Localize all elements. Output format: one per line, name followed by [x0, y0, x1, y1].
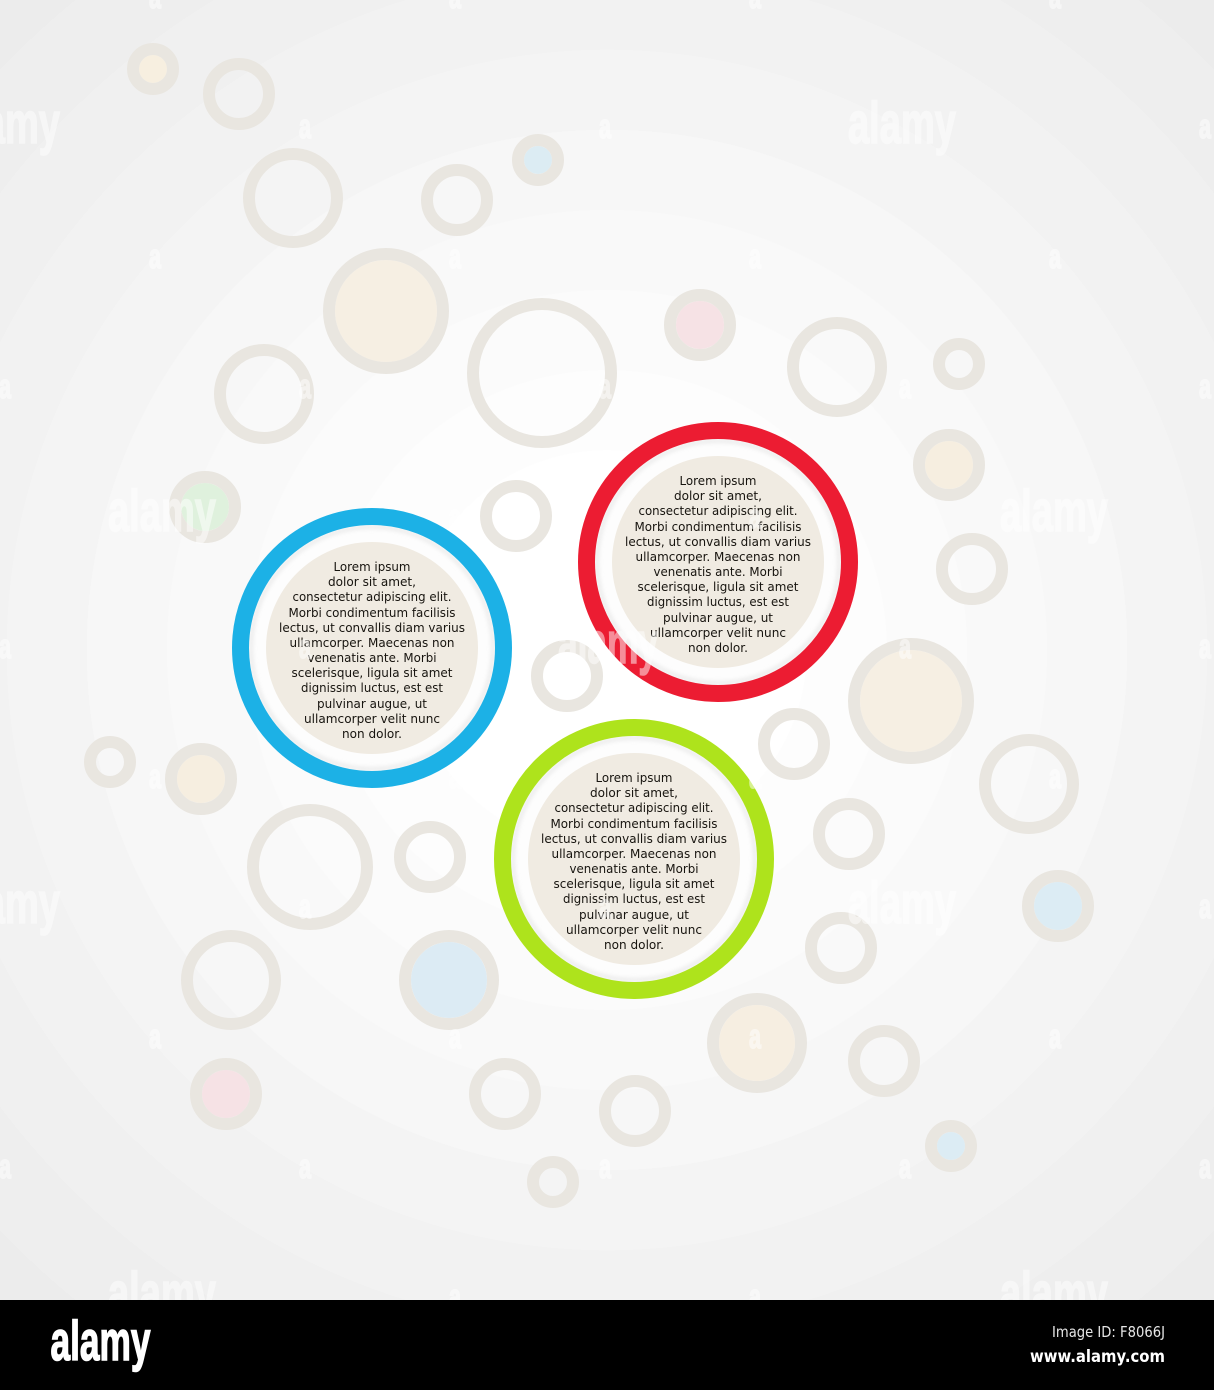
text block: blue circle copy: venenatis ante. Morbi: [308, 650, 436, 665]
watermark overlay: a: [449, 498, 462, 536]
watermark overlay: a: [599, 108, 612, 146]
bubble: large cream bottom: [713, 999, 801, 1087]
text block: green circle copy: ullamcorper. Maecenas non: [552, 846, 716, 861]
text block: red circle copy: Lorem ipsum: [680, 473, 756, 488]
text block: green circle copy: consectetur adipiscing elit.: [554, 800, 714, 815]
text block: red circle copy: non dolor.: [688, 640, 748, 655]
watermark overlay: alamy: [848, 91, 956, 156]
watermark overlay: a: [749, 498, 762, 536]
watermark overlay: a: [449, 1018, 462, 1056]
watermark overlay: a: [299, 888, 312, 926]
watermark overlay: a: [749, 1018, 762, 1056]
panel: green circle: [502, 728, 766, 990]
text block: red circle copy: scelerisque, ligula sit amet: [638, 579, 799, 594]
watermark overlay: a: [749, 238, 762, 276]
text block: blue circle copy: pulvinar augue, ut: [317, 696, 427, 711]
bubble: large cream top: [329, 254, 443, 368]
text block: blue circle copy: dolor sit amet,: [328, 574, 416, 589]
text block: red circle copy: ullamcorper. Maecenas non: [636, 549, 800, 564]
watermark overlay: a: [449, 238, 462, 276]
text block: green circle copy: lectus, ut convallis diam varius: [541, 831, 727, 846]
footer bar: [0, 1300, 1214, 1390]
text block: green circle copy: dignissim luctus, est est: [563, 891, 705, 906]
text block: green circle copy: Lorem ipsum: [596, 770, 672, 785]
watermark overlay: a: [299, 368, 312, 406]
watermark overlay: a: [149, 238, 162, 276]
bubble: pink top: [670, 295, 730, 355]
text block: green circle copy: non dolor.: [604, 937, 664, 952]
footer logo: alamy: [50, 1309, 150, 1372]
text block: blue circle copy: ullamcorper velit nunc: [304, 711, 440, 726]
text block: red circle copy: Morbi condimentum facilisis: [634, 519, 802, 534]
text block: blue circle copy: Morbi condimentum facilisis: [288, 605, 456, 620]
text block: blue circle copy: Lorem ipsum: [334, 559, 410, 574]
text block: green circle copy: venenatis ante. Morbi: [570, 861, 698, 876]
text block: blue circle copy: ullamcorper. Maecenas non: [290, 635, 454, 650]
text block: blue circle copy: [279, 559, 465, 741]
watermark overlay: alamy: [108, 479, 216, 544]
bubble: cream right: [919, 435, 979, 495]
text block: blue circle copy: dignissim luctus, est est: [301, 680, 443, 695]
text block: green circle copy: [541, 770, 727, 952]
watermark overlay: a: [149, 758, 162, 796]
bubble: small blue: [518, 140, 558, 180]
watermark overlay: a: [899, 628, 912, 666]
watermark overlay: alamy: [1000, 1261, 1108, 1326]
bubble: large blue bottom: [405, 936, 493, 1024]
bubble: small cream: [133, 49, 173, 89]
watermark overlay: a: [149, 1018, 162, 1056]
text block: red circle copy: [625, 473, 811, 655]
image id: Image ID: F8066J: [1052, 1323, 1165, 1341]
text block: green circle copy: scelerisque, ligula sit amet: [554, 876, 715, 891]
watermark overlay: a: [749, 758, 762, 796]
watermark overlay: a: [449, 1278, 462, 1316]
watermark overlay: alamy: [558, 611, 658, 676]
text block: blue circle copy: non dolor.: [342, 726, 402, 741]
panel: blue circle: [240, 516, 504, 780]
watermark overlay: alamy: [1000, 479, 1108, 544]
text block: green circle copy: Morbi condimentum facilisis: [550, 816, 718, 831]
text block: red circle copy: consectetur adipiscing elit.: [638, 503, 798, 518]
bubble: blue right: [1028, 876, 1088, 936]
watermark overlay: a: [899, 368, 912, 406]
watermark overlay: a: [1049, 758, 1062, 796]
watermark overlay: a: [599, 1148, 612, 1186]
watermark overlay: a: [599, 368, 612, 406]
text block: blue circle copy: scelerisque, ligula sit amet: [292, 665, 453, 680]
watermark overlay: a: [449, 758, 462, 796]
text block: green circle copy: dolor sit amet,: [590, 785, 678, 800]
bubble: small blue bottom: [931, 1126, 971, 1166]
text block: green circle copy: ullamcorper velit nunc: [566, 922, 702, 937]
watermark overlay: a: [299, 108, 312, 146]
text block: red circle copy: pulvinar augue, ut: [663, 610, 773, 625]
text block: red circle copy: venenatis ante. Morbi: [654, 564, 782, 579]
bubble: pink bottom: [196, 1064, 256, 1124]
watermark overlay: a: [749, 1278, 762, 1316]
website url: www.alamy.com: [1030, 1347, 1165, 1367]
decorative bubble rings: [90, 49, 1088, 1202]
panel: red circle: [586, 430, 850, 694]
text block: green circle copy: pulvinar augue, ut: [579, 907, 689, 922]
text block: red circle copy: dignissim luctus, est est: [647, 594, 789, 609]
bubble: green left: [175, 477, 235, 537]
bubble: cream left: [171, 749, 231, 809]
text block: blue circle copy: consectetur adipiscing elit.: [292, 589, 452, 604]
watermark overlay: a: [1049, 238, 1062, 276]
watermark overlay: alamy: [848, 871, 956, 936]
text block: red circle copy: ullamcorper velit nunc: [650, 625, 786, 640]
watermark overlay: a: [299, 1148, 312, 1186]
text block: red circle copy: lectus, ut convallis diam varius: [625, 534, 811, 549]
watermark overlay: a: [899, 1148, 912, 1186]
watermark overlay: alamy: [108, 1261, 216, 1326]
text block: blue circle copy: lectus, ut convallis diam varius: [279, 620, 465, 635]
text block: red circle copy: dolor sit amet,: [674, 488, 762, 503]
watermark overlay: a: [1049, 1018, 1062, 1056]
watermark overlay: a: [299, 628, 312, 666]
watermark overlay: a: [599, 888, 612, 926]
bubble: large cream right: [854, 644, 968, 758]
